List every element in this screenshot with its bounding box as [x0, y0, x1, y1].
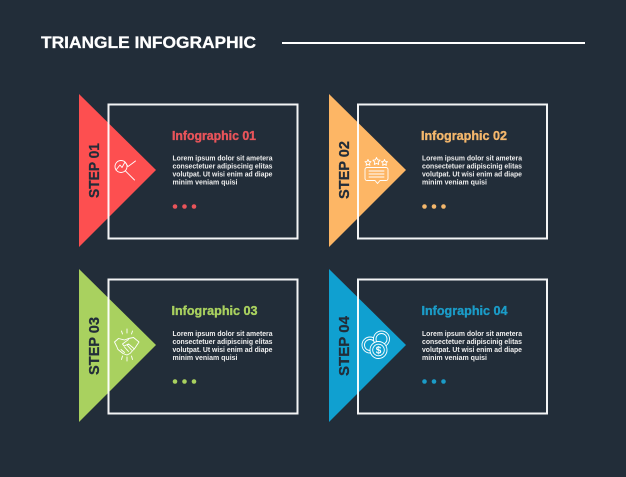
step label: STEP 02 [337, 141, 353, 199]
heading: Infographic 04 [422, 303, 508, 318]
step label: STEP 04 [337, 316, 353, 376]
frame [358, 104, 547, 238]
body text: Lorem ipsum dolor sit ametera [172, 329, 273, 338]
body text: Lorem ipsum dolor sit ametera [172, 154, 273, 162]
panel: step 02 [329, 94, 547, 247]
dots [173, 379, 196, 384]
heading: Infographic 02 [421, 128, 507, 143]
panel: step 03 [79, 269, 298, 422]
body text: consectetuer adipiscinig elitas [172, 162, 272, 170]
title rule [282, 42, 585, 44]
body text: volutpat. Ut wisi enim ad diape [422, 345, 522, 354]
heading: Infographic 03 [172, 303, 258, 318]
icon: coins [362, 331, 390, 358]
body text: consectetuer adipiscinig elitas [422, 337, 522, 346]
body text: minim veniam quisi [422, 178, 487, 186]
frame [108, 280, 298, 414]
icon: rating speech bubble [365, 158, 388, 184]
frame [108, 104, 298, 238]
blue triangle [329, 269, 406, 422]
red triangle [79, 94, 156, 247]
dots [173, 204, 196, 209]
body text: minim veniam quisi [172, 178, 238, 186]
dots [422, 379, 446, 384]
heading: Infographic 01 [172, 128, 256, 143]
icon: coins: $ [376, 346, 382, 356]
icon: magnifier chart [115, 160, 136, 180]
icon: handshake [114, 329, 139, 361]
body text: volutpat. Ut wisi enim ad diape [422, 170, 522, 178]
orange triangle [329, 94, 406, 247]
green triangle [79, 269, 156, 422]
body text: minim veniam quisi [422, 353, 487, 362]
body text: Lorem ipsum dolor sit ametera [422, 154, 523, 162]
dots [422, 204, 446, 209]
body text: Lorem ipsum dolor sit ametera [422, 329, 523, 338]
step label: STEP 03 [87, 317, 103, 375]
body text: volutpat. Ut wisi enim ad diape [172, 170, 272, 178]
body text: volutpat. Ut wisi enim ad diape [172, 345, 272, 354]
panel: step 04 [329, 269, 547, 422]
frame [358, 280, 547, 414]
body text: minim veniam quisi [172, 353, 238, 362]
body text: consectetuer adipiscinig elitas [422, 162, 522, 170]
title: TRIANGLE INFOGRAPHIC [41, 34, 256, 52]
body text: consectetuer adipiscinig elitas [172, 337, 272, 346]
panel: step 01 [79, 94, 298, 247]
step label: STEP 01 [87, 143, 103, 198]
